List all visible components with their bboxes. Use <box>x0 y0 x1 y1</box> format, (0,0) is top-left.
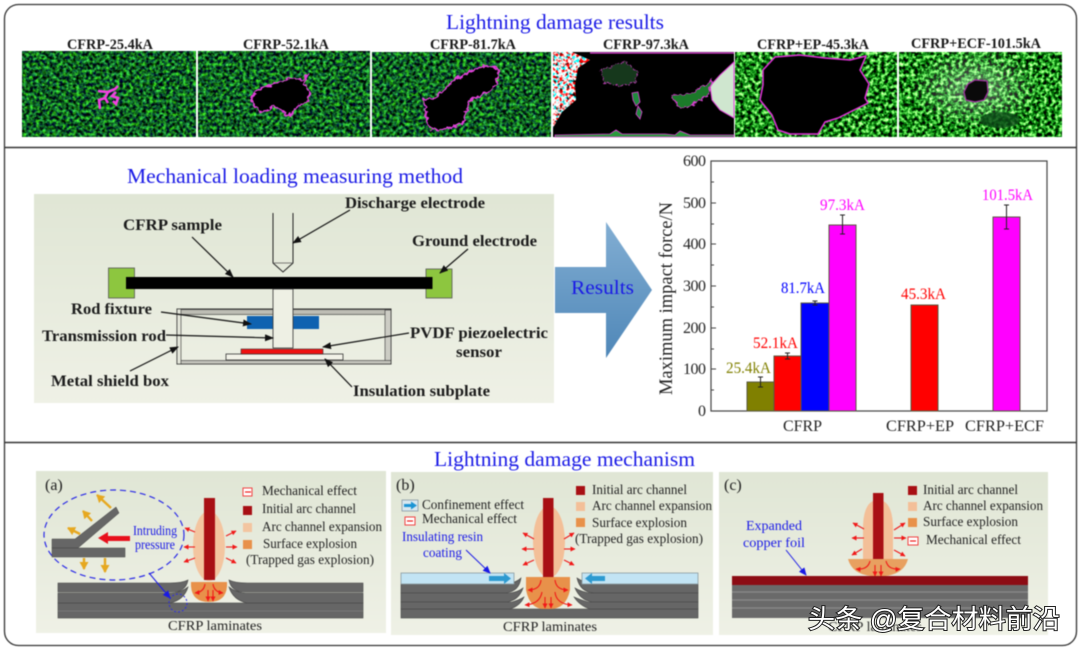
diagram: test rig <box>108 213 452 364</box>
chart axes <box>656 153 1047 435</box>
CFRP sample bar <box>126 277 432 289</box>
chart axes: 100 <box>683 361 706 378</box>
diagram labels and leader arrows: PVDF piezoelectric <box>410 325 548 342</box>
diagram labels and leader arrows: Rod fixture <box>71 301 152 318</box>
legend a <box>243 483 382 567</box>
legend c: Arc channel expansion <box>923 498 1043 513</box>
image: CFRP 25.4kA <box>22 37 196 137</box>
error bars <box>758 205 1009 387</box>
subpanel b: CFRP laminates <box>503 620 597 635</box>
subpanel c: (c) <box>724 477 742 494</box>
transmission rod <box>273 289 293 348</box>
legend a: Mechanical effect <box>262 483 357 498</box>
bars <box>747 217 1020 411</box>
legend b: Surface explosion <box>592 515 687 530</box>
PVDF sensor <box>241 349 323 354</box>
image: CFRP 81.7kA: CFRP-81.7kA <box>430 37 517 53</box>
chart axes: CFRP+EP <box>886 418 954 435</box>
image: CFRP+ECF 101.5kA: CFRP+ECF-101.5kA <box>911 36 1042 52</box>
laminate a <box>58 580 363 618</box>
image: CFRP 25.4kA: CFRP-25.4kA <box>67 37 154 53</box>
subpanel b: (b) <box>396 477 415 494</box>
expanded copper foil callout <box>743 518 806 575</box>
discharge electrode <box>273 213 293 272</box>
bar value labels: 52.1kA <box>753 335 799 352</box>
bar value labels: 45.3kA <box>901 286 947 303</box>
bar value labels: 97.3kA <box>820 197 866 214</box>
image: CFRP 81.7kA <box>372 37 551 137</box>
legend b: Confinement effect <box>422 497 524 512</box>
inset callout a <box>44 490 187 612</box>
diagram labels and leader arrows: Ground electrode <box>412 233 537 250</box>
diagram labels and leader arrows: CFRP sample <box>123 217 222 234</box>
diagram labels and leader arrows: Insulation subplate <box>353 383 490 400</box>
insulating resin coating callout: Insulating resin <box>402 529 483 544</box>
legend b: Mechanical effect <box>422 511 517 526</box>
bar value labels <box>726 187 1034 377</box>
legend a: Arc channel expansion <box>262 519 382 534</box>
arc and explosion c <box>848 493 908 576</box>
expanded copper foil callout: Expanded <box>746 518 802 533</box>
panel: mechanical loading <box>34 153 1047 435</box>
legend b: (Trapped gas explosion) <box>575 531 703 546</box>
diagram labels and leader arrows: Metal shield box <box>51 373 169 390</box>
subpanel c: CFRP laminates <box>828 620 922 635</box>
divider bottom <box>5 442 1076 444</box>
arc and explosion b <box>522 498 575 609</box>
subpanel c <box>719 472 1048 635</box>
confinement arrows b <box>489 573 605 584</box>
subpanel b <box>391 472 713 635</box>
legend a: Surface explosion <box>263 536 357 551</box>
subpanel a: CFRP laminates <box>168 619 262 634</box>
chart axes: CFRP <box>783 418 822 435</box>
arc and explosion a <box>184 498 237 602</box>
chart axes: 500 <box>683 195 706 212</box>
laminate b <box>401 578 698 618</box>
legend a: (Trapped gas explosion) <box>246 552 374 567</box>
rod fixture <box>247 316 319 329</box>
inset callout a: pressure <box>135 537 175 552</box>
insulating resin coating callout <box>402 529 490 573</box>
shield box <box>177 309 391 364</box>
diagram labels and leader arrows: Transmission rod <box>42 328 166 345</box>
bar value labels: 81.7kA <box>781 280 826 297</box>
bar value labels: 101.5kA <box>982 187 1034 204</box>
diagram background <box>34 194 554 403</box>
legend c: Mechanical effect <box>926 532 1021 547</box>
subpanel a <box>36 471 386 634</box>
laminate c <box>732 576 1028 618</box>
legend c: Initial arc channel <box>923 482 1018 497</box>
divider top <box>5 146 1076 148</box>
chart axes: Maximum impact force/N <box>656 202 677 395</box>
chart axes: CFRP+ECF <box>965 418 1044 435</box>
expanded copper foil callout: copper foil <box>743 535 805 550</box>
panel: lightning damage results <box>22 10 1062 137</box>
chart axes: 600 <box>683 153 706 170</box>
image: CFRP 97.3kA <box>553 37 734 137</box>
inset callout a: Intruding <box>133 523 177 538</box>
bar value labels: 25.4kA <box>726 360 772 377</box>
insulating resin coating callout: coating <box>423 545 462 560</box>
image: CFRP 97.3kA: CFRP-97.3kA <box>603 37 690 53</box>
legend a: Initial arc channel <box>262 501 356 516</box>
chart axes: 400 <box>683 236 706 253</box>
chart axes: 0 <box>698 403 706 420</box>
watermark: 头条 @复合材料前沿 <box>808 604 1060 634</box>
subpanel a: (a) <box>45 477 63 494</box>
arrow: results: Results <box>571 277 634 299</box>
bar chart: maximum impact force <box>656 153 1047 435</box>
legend b: Arc channel expansion <box>592 498 712 513</box>
image: CFRP 52.1kA: CFRP-52.1kA <box>243 37 330 53</box>
ground electrodes <box>108 268 452 298</box>
chart axes: 300 <box>683 278 706 295</box>
legend c: Surface explosion <box>923 514 1018 529</box>
image: CFRP+ECF 101.5kA <box>899 36 1062 137</box>
legend b <box>402 482 712 546</box>
heading: lightning damage mechanism: Lightning damage mechanism <box>434 447 695 471</box>
resin coating b <box>401 573 698 584</box>
subplate <box>226 354 343 360</box>
legend c <box>908 482 1043 547</box>
panel: lightning damage mechanism <box>36 447 1048 635</box>
heading: mechanical loading measuring method: Mechanical loading measuring method <box>127 164 464 188</box>
diagram labels and leader arrows <box>42 195 548 400</box>
image: CFRP+EP 45.3kA <box>735 37 897 137</box>
chart axes: 200 <box>683 320 706 337</box>
diagram labels and leader arrows: Discharge electrode <box>345 195 485 212</box>
diagram labels and leader arrows: sensor <box>456 344 502 361</box>
arrow: results <box>555 222 652 358</box>
image: CFRP+EP 45.3kA: CFRP+EP-45.3kA <box>757 37 870 53</box>
image: CFRP 52.1kA <box>198 37 370 137</box>
legend b: Initial arc channel <box>592 482 687 497</box>
heading: lightning damage results: Lightning damage results <box>446 10 664 34</box>
